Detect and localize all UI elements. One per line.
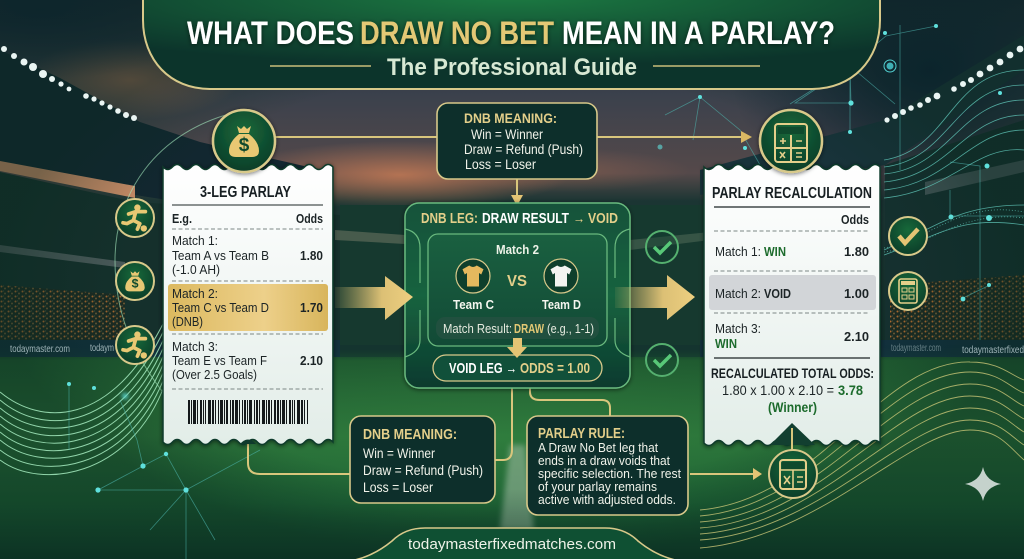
match 2 highlighted row: 1.70 xyxy=(300,300,323,315)
match result pill: DRAW xyxy=(514,321,545,336)
bottom callout: parlay rule: specific selection. The rest xyxy=(538,466,681,481)
top callout: DNB meaning: Draw = Refund (Push) xyxy=(464,142,583,157)
barcode xyxy=(188,400,309,424)
versus: VS xyxy=(507,273,527,290)
recalculated total: (Winner) xyxy=(768,399,817,415)
footer URL banner: todaymasterfixedmatches.com xyxy=(408,536,616,553)
match result pill: (e.g., 1-1) xyxy=(547,321,594,336)
network nodes upper right xyxy=(658,24,1024,340)
title banner xyxy=(143,0,880,89)
match result pill: Match Result: xyxy=(443,321,512,336)
match 1 row: 1.80 xyxy=(300,248,323,263)
icon: gold check xyxy=(889,217,927,255)
icon: green check lower xyxy=(646,344,678,376)
receipt heading: 3-LEG PARLAY xyxy=(200,184,291,201)
pitch-side banners xyxy=(10,343,1024,356)
panel heading: DNB LEG: xyxy=(421,211,478,227)
team names: Team D xyxy=(542,297,581,312)
bottom callout: parlay rule xyxy=(527,416,688,515)
title heading: WHAT DOES xyxy=(187,15,354,51)
void leg pill: ODDS = 1.00 xyxy=(520,360,590,377)
bottom callout: parlay rule: PARLAY RULE: xyxy=(538,425,625,442)
match 1 row: Team A vs Team B xyxy=(172,248,269,263)
match 2 highlighted row: Match 2: xyxy=(172,286,218,301)
icon: sparkle xyxy=(965,467,1001,501)
icon: player 2 xyxy=(116,326,154,364)
match 3 row: Match 3: xyxy=(172,339,218,354)
recalculated total xyxy=(711,365,874,415)
panel heading: DRAW RESULT xyxy=(482,211,569,227)
bottom callout: DNB meaning: Loss = Loser xyxy=(363,480,433,495)
bottom callout: DNB meaning: DNB MEANING: xyxy=(363,426,457,443)
footer URL banner xyxy=(355,528,675,559)
bottom callout: parlay rule: of your parlay remains xyxy=(538,479,657,494)
match 2 void row: VOID xyxy=(764,286,791,301)
match 3 row: 2.10 xyxy=(300,353,323,368)
column headers: E.g. xyxy=(172,211,192,226)
match 2 void row xyxy=(709,275,876,310)
match 3 row: (Over 2.5 Goals) xyxy=(172,367,257,382)
decorative wave lines upper right xyxy=(884,70,1024,255)
void leg pill xyxy=(433,355,602,381)
inner match card: Match 2 xyxy=(496,242,539,257)
match 3 row: 2.10 xyxy=(844,329,869,344)
icon: player 1 xyxy=(116,199,154,237)
bottom callout: parlay rule: A Draw No Bet leg that xyxy=(538,440,658,455)
center panel: DNB leg xyxy=(405,203,630,388)
match 1 row: (-1.0 AH) xyxy=(172,262,220,277)
receipt heading: PARLAY RECALCULATION xyxy=(712,185,872,202)
icon: money bag top left xyxy=(213,110,275,172)
title heading: MEAN IN A PARLAY? xyxy=(562,15,835,51)
top callout: DNB meaning xyxy=(437,103,597,179)
match result pill xyxy=(436,317,599,339)
decorative wave lines left xyxy=(0,110,245,475)
icon: money bag side xyxy=(116,262,154,300)
bottom callout: parlay rule: ends in a draw voids that xyxy=(538,453,670,468)
odds header: Odds xyxy=(841,212,869,227)
pitch-side banners: todaym xyxy=(90,343,114,354)
left receipt: 3-leg parlay xyxy=(163,164,333,444)
title heading: DRAW NO BET xyxy=(360,15,554,51)
match 1 row: Match 1: xyxy=(715,244,761,259)
right receipt: parlay recalculation xyxy=(704,164,880,452)
top callout: DNB meaning: DNB MEANING: xyxy=(464,110,557,126)
pitch-side banners: todaymaster.com xyxy=(10,344,70,355)
icon: calculator bottom xyxy=(769,450,817,498)
match 2 highlighted row: Team C vs Team D xyxy=(172,300,269,315)
right gold arrow xyxy=(615,275,695,320)
bottom callout: DNB meaning: Draw = Refund (Push) xyxy=(363,463,483,478)
column headers xyxy=(172,211,323,226)
left gold arrow xyxy=(335,276,413,320)
match 2 void row: Match 2: xyxy=(715,286,761,301)
match 2 highlighted row xyxy=(168,284,328,331)
network nodes lower left xyxy=(67,382,260,559)
small arrow down xyxy=(507,338,527,358)
match 1 row xyxy=(172,233,323,277)
icon: calculator top xyxy=(760,110,822,172)
recalculated total: RECALCULATED TOTAL ODDS: xyxy=(711,365,874,381)
team names: Team C xyxy=(453,297,495,312)
stadium lights xyxy=(1,46,1023,123)
match 3 row: Team E vs Team F xyxy=(172,353,267,368)
bottom callout: parlay rule: active with adjusted odds. xyxy=(538,492,676,507)
inner match card xyxy=(428,234,607,346)
recalculated total: 3.78 xyxy=(838,382,863,398)
panel heading xyxy=(421,211,618,227)
pitch-side banners: todaymaster.com xyxy=(891,343,941,354)
match 3 row: WIN xyxy=(715,336,737,351)
match 1 row: WIN xyxy=(764,244,786,259)
decorative wave lines lower right xyxy=(700,362,1024,548)
match 3 row xyxy=(172,339,323,382)
team D shirt xyxy=(544,259,578,293)
icon: calculator side xyxy=(889,272,927,310)
team C shirt xyxy=(456,259,490,293)
match 1 row: Match 1: xyxy=(172,233,218,248)
bottom callout: DNB meaning xyxy=(350,416,495,503)
match 3 row: Match 3: xyxy=(715,321,761,336)
icon: green check upper xyxy=(646,231,678,263)
arrow: meaning to DNB leg xyxy=(511,179,523,206)
match 1 row: 1.80 xyxy=(844,244,869,259)
column headers: Odds xyxy=(296,211,323,226)
match 1 row xyxy=(715,244,869,259)
match 2 void row: 1.00 xyxy=(844,286,869,301)
panel heading: → xyxy=(573,211,585,227)
match 2 highlighted row: (DNB) xyxy=(172,314,203,329)
bottom callout: DNB meaning: Win = Winner xyxy=(363,446,435,461)
team names xyxy=(453,297,581,312)
panel heading: VOID xyxy=(588,211,618,227)
top callout: DNB meaning: Loss = Loser xyxy=(465,157,536,172)
recalculated total: 1.80 x 1.00 x 2.10 = xyxy=(722,382,834,398)
connector lines xyxy=(248,131,762,480)
title heading xyxy=(187,15,835,51)
top callout: DNB meaning: Win = Winner xyxy=(471,127,543,142)
subtitle: The Professional Guide xyxy=(387,54,637,81)
match 3 row xyxy=(715,321,869,351)
void leg pill: VOID LEG → xyxy=(449,360,517,377)
